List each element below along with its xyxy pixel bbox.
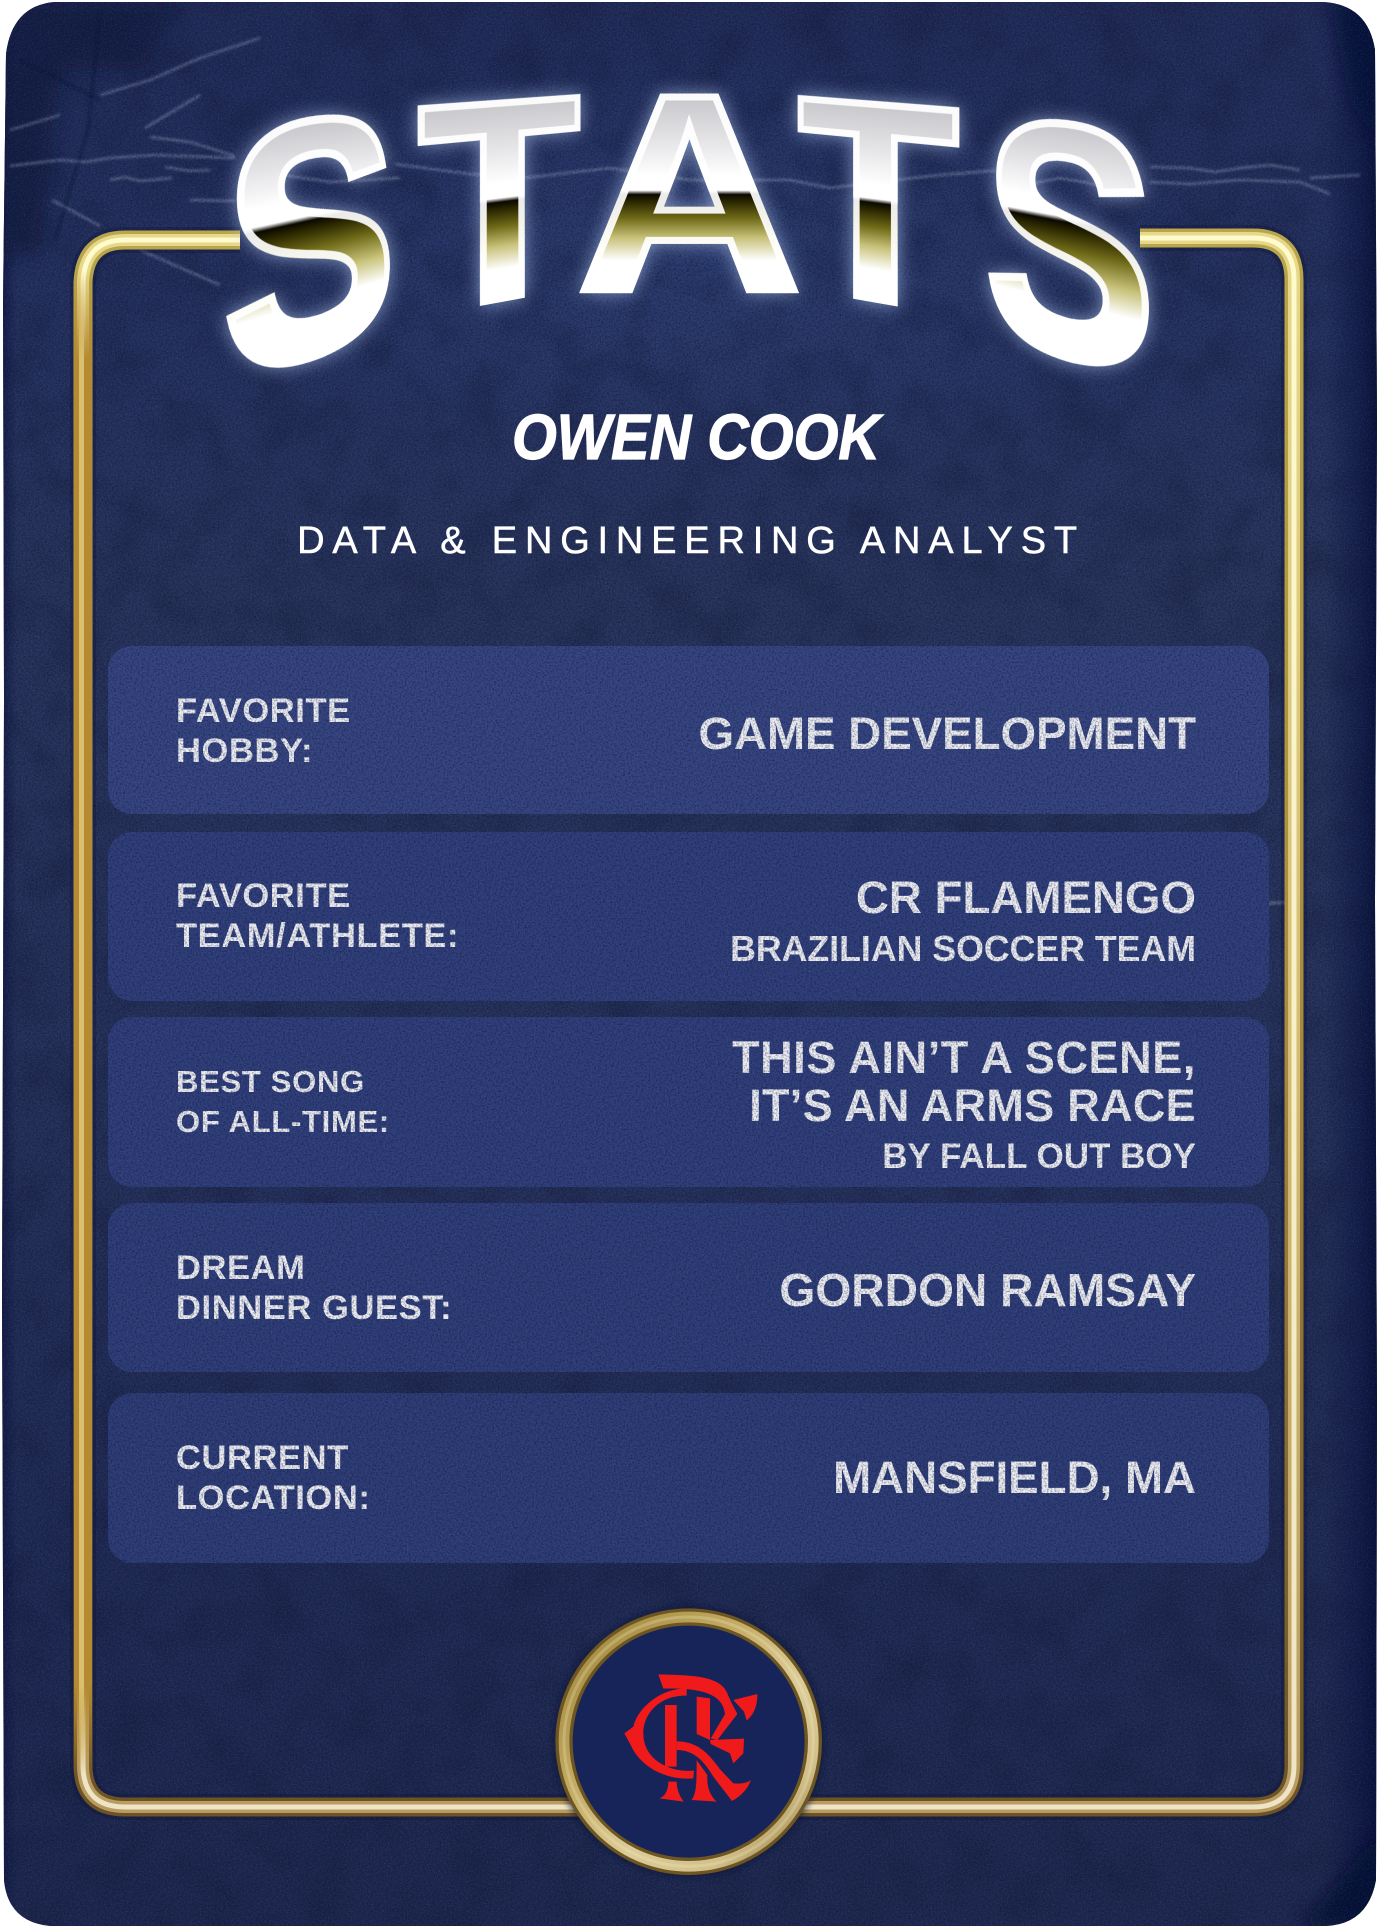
badge disc bbox=[565, 1618, 813, 1866]
title: STATS: A bbox=[577, 36, 802, 349]
stat row: dream dinner guest: DINNER GUEST: bbox=[176, 1289, 452, 1327]
stat row: best song: OF ALL-TIME: bbox=[176, 1104, 390, 1139]
subtitle: job title: DATA & ENGINEERING ANALYST bbox=[297, 520, 1085, 562]
stat row: dream dinner guest bbox=[108, 1203, 1269, 1372]
stat row: dream dinner guest: GORDON RAMSAY bbox=[779, 1264, 1196, 1316]
stat row: favorite hobby: FAVORITE bbox=[176, 692, 351, 730]
stat row: favorite hobby bbox=[108, 646, 1269, 814]
stat row: favorite team: FAVORITE bbox=[176, 877, 351, 915]
stat row: favorite hobby: HOBBY: bbox=[176, 732, 313, 770]
name: Owen Cook: OWEN COOK bbox=[512, 401, 880, 473]
icon: team monogram emblem bbox=[624, 1674, 757, 1802]
title: STATS: T bbox=[798, 39, 959, 376]
stat row: best song: BY FALL OUT BOY bbox=[882, 1137, 1196, 1176]
title: STATS: S bbox=[985, 51, 1157, 455]
title: STATS bbox=[217, 36, 1160, 464]
title: STATS: T bbox=[418, 38, 580, 377]
stat row: current location bbox=[108, 1393, 1269, 1563]
title: STATS: S bbox=[222, 47, 396, 464]
ring shadow bbox=[553, 1606, 825, 1878]
stat row: favorite team bbox=[108, 832, 1269, 1001]
stat row: current location: CURRENT bbox=[176, 1439, 349, 1477]
stat row: favorite team: CR FLAMENGO bbox=[856, 872, 1196, 923]
stat row: best song: THIS AIN’T A SCENE, bbox=[732, 1032, 1196, 1083]
stat row: favorite hobby: GAME DEVELOPMENT bbox=[698, 708, 1196, 759]
stat row: best song: IT’S AN ARMS RACE bbox=[749, 1080, 1196, 1131]
stat row: dream dinner guest: DREAM bbox=[176, 1249, 306, 1287]
badge: team crest bbox=[552, 1604, 826, 1878]
gold ring bbox=[564, 1617, 813, 1866]
stat row: best song bbox=[108, 1017, 1269, 1187]
stat row: favorite team: BRAZILIAN SOCCER TEAM bbox=[730, 929, 1196, 969]
stat row: current location: LOCATION: bbox=[176, 1479, 370, 1517]
stat row: current location: MANSFIELD, MA bbox=[833, 1452, 1196, 1503]
stat row: best song: BEST SONG bbox=[176, 1064, 365, 1099]
stat row: favorite team: TEAM/ATHLETE: bbox=[176, 917, 459, 955]
